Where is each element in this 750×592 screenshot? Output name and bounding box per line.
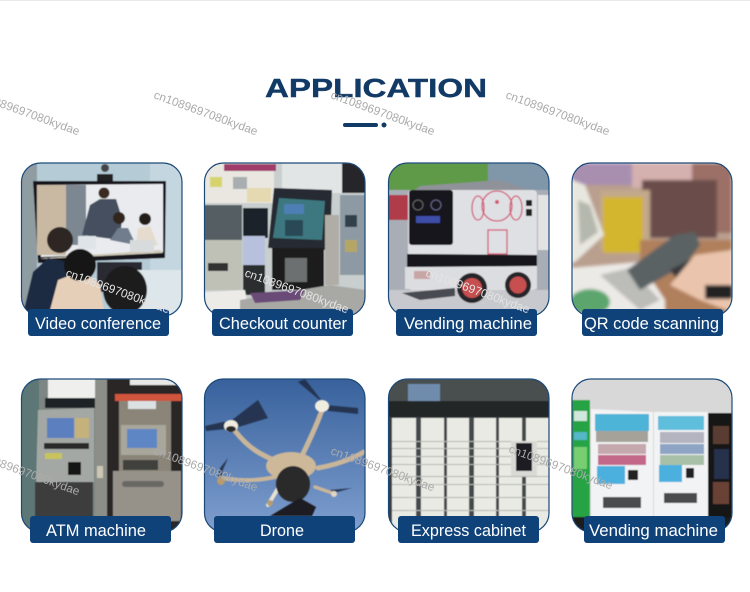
watermarks: cn1089697080kydae: [243, 266, 351, 316]
top edge line: [0, 0, 750, 1]
label: checkout counter: [212, 309, 353, 336]
label: vending machine: [396, 309, 537, 336]
photo: self checkout kiosk: [204, 163, 366, 317]
photo: meeting room with video screen: [21, 163, 183, 317]
watermarks: cn1089697080kydae: [424, 266, 532, 316]
label: vending machine: Vending machine: [404, 315, 532, 333]
photo: drink vending machines: [572, 379, 732, 533]
panel: checkout counter: [204, 163, 366, 336]
photo: parcel lockers: [388, 379, 550, 533]
title underline accent: [343, 122, 386, 128]
photo: hexacopter in blue sky: [204, 379, 366, 533]
watermarks: cn1089697080kydae: [152, 88, 260, 138]
watermarks: [0, 88, 615, 498]
panel: vending machines: [572, 379, 732, 543]
label: express cabinet: [398, 516, 539, 543]
watermarks: cn1089697080kydae: [329, 444, 437, 494]
watermarks: cn1089697080kydae: [64, 266, 172, 316]
watermarks: cn1089697080kydae: [329, 88, 437, 138]
title: APPLICATION: [265, 73, 487, 103]
panel: ATM machine: [21, 379, 183, 543]
label: vending machine: [584, 516, 725, 543]
label: ATM machine: [30, 516, 171, 543]
watermarks: cn1089697080kydae: [507, 442, 615, 492]
label: drone: Drone: [260, 522, 304, 540]
watermarks: cn1089697080kydae: [152, 444, 260, 494]
photo: two ATMs: [21, 379, 183, 533]
label: video conference: Video conference: [35, 315, 161, 333]
label: QR code scanning: QR code scanning: [584, 315, 719, 333]
label: video conference: [28, 309, 169, 336]
label: checkout counter: Checkout counter: [219, 315, 347, 333]
label: QR code scanning: [582, 309, 723, 336]
photo: delivery robot on road: [388, 163, 550, 317]
label: drone: [214, 516, 355, 543]
panel: vending robot: [388, 163, 550, 336]
panel: express cabinet: [388, 379, 550, 543]
label: ATM machine: ATM machine: [46, 522, 146, 540]
panel: video conference: [21, 163, 183, 336]
panel: drone: [204, 379, 366, 543]
photo: handheld barcode scanner: [570, 163, 732, 317]
panel: QR code scanning: [570, 163, 732, 336]
label: express cabinet: Express cabinet: [411, 522, 526, 540]
label: vending machine: Vending machine: [589, 522, 718, 540]
watermarks: cn1089697080kydae: [504, 88, 612, 138]
